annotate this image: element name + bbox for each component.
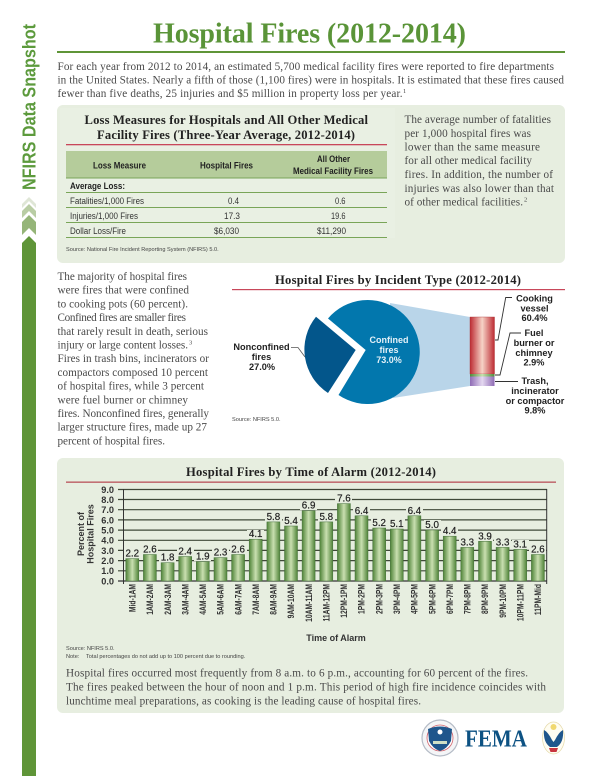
slice label: confined: Confined (370, 335, 408, 345)
value labels: 1.8 (161, 553, 175, 564)
x axis labels: 4PM-5PM (410, 584, 420, 614)
side text: injuries was also lower than that (404, 183, 555, 195)
left paragraph: confined fires: were fuel burner or chimney (58, 394, 188, 406)
value labels: 5.2 (372, 518, 386, 529)
loss table: All Other (317, 154, 350, 165)
loss table: $11,290 (317, 226, 346, 237)
logo: FEMA: FEMA (465, 726, 528, 752)
loss table: Hospital Fires (200, 160, 253, 172)
left paragraph: confined fires: percent of hospital fires. (58, 435, 165, 447)
value labels (125, 494, 545, 564)
slice label: confined (370, 335, 408, 365)
x axis labels: 7PM-8PM (463, 584, 473, 614)
x axis labels: 11AM-12PM (322, 584, 332, 621)
x axis labels: 6AM-7AM (233, 584, 244, 615)
x axis labels (128, 584, 543, 622)
y axis labels: 5.0 (101, 526, 114, 536)
label: trash (506, 376, 565, 416)
label: fuel burner: burner or (514, 338, 555, 348)
loss table: Loss Measure (93, 160, 146, 172)
sidebar chevrons and bar (22, 197, 36, 776)
y axis title: Percent of (76, 511, 86, 556)
side text: The average number of fatalities (404, 114, 551, 126)
pie chart: incident type (232, 273, 565, 423)
label: cooking vessel: 60.4% (521, 313, 548, 323)
y axis labels: 2.0 (101, 556, 114, 566)
bottom paragraph: The fires peaked between the hour of noon and 1 p.m. This period of high fire incidence coincides with (66, 682, 546, 694)
x axis labels: 3PM-4PM (392, 584, 402, 614)
loss table: 17.3 (224, 211, 240, 222)
left paragraph: confined fires: were fires that were confined (58, 285, 189, 297)
side text (404, 114, 555, 208)
left paragraph: confined fires: injury or large content losses. (58, 340, 188, 352)
side text: for all other medical facility (404, 155, 532, 167)
x axis title: Time of Alarm (306, 633, 366, 643)
intro paragraph (58, 61, 564, 100)
label: cooking vessel: vessel (520, 304, 549, 314)
chart source and note: Total percentages do not add up to 100 percent due to rounding. (86, 654, 246, 660)
x axis labels: 8PM-9PM (480, 584, 490, 614)
x axis labels: 11PM-Mid (533, 584, 543, 615)
chart source and note (66, 646, 246, 660)
table heading: Facility Fires (Three-Year Average, 2012-2014) (97, 128, 355, 142)
label: fuel burner: chimney (515, 348, 554, 358)
x axis labels: 5AM-6AM (216, 584, 226, 615)
y axis labels: 0.0 (101, 576, 114, 586)
loss table (66, 151, 387, 238)
value labels: 3.9 (478, 531, 492, 542)
chart heading: Hospital Fires by Incident Type (2012-2014) (275, 273, 521, 287)
y axis labels: 9.0 (101, 485, 114, 495)
value labels: 5.1 (390, 519, 404, 530)
x axis labels: 9PM-10PM (498, 584, 508, 618)
left paragraph: confined fires: fires. Nonconfined fires, generally (58, 408, 209, 420)
x axis labels: 12PM-1PM (339, 584, 349, 618)
left paragraph: confined fires: Confined fires are smaller fires (58, 312, 186, 324)
x axis labels: Mid-1AM (128, 584, 138, 612)
x axis labels: 1PM-2PM (357, 584, 367, 614)
pie source: Source: NFIRS 5.0. (232, 417, 281, 423)
sidebar label: NFIRS Data Snapshot (18, 24, 40, 190)
y axis title: Hospital Fires (86, 504, 96, 564)
value labels: 2.4 (178, 546, 193, 558)
side text: of other medical facilities. (404, 196, 523, 208)
value labels: 2.6 (231, 544, 245, 556)
chart heading: Hospital Fires by Time of Alarm (2012-2014) (186, 465, 436, 479)
x axis labels: 1AM-2AM (145, 584, 155, 615)
value labels: 7.6 (337, 494, 351, 505)
loss table: Injuries/1,000 Fires (70, 211, 138, 222)
left paragraph: confined fires: Fires in trash bins, incinerators or (58, 353, 209, 365)
x axis labels: 2AM-3AM (163, 584, 173, 615)
y axis labels: 6.0 (101, 515, 114, 525)
x axis labels: 7AM-8AM (251, 584, 261, 615)
label: trash: Trash, (521, 376, 549, 386)
connector wedge (390, 303, 470, 398)
x axis labels: 10PM-11PM (515, 584, 526, 621)
value labels: 6.9 (302, 501, 315, 512)
value labels: 6.4 (408, 506, 422, 517)
value labels: 5.4 (284, 516, 298, 527)
side text: lower than the same measure (404, 142, 540, 154)
loss table: Dollar Loss/Fire (70, 226, 126, 237)
panel: time of alarm (57, 458, 564, 713)
value labels: 3.1 (513, 539, 527, 550)
label: fuel burner: 2.9% (524, 358, 544, 368)
x axis labels: 4AM-5AM (198, 584, 208, 615)
intro paragraph: 1 (403, 88, 406, 95)
y axis title (76, 504, 96, 564)
value labels: 4.1 (249, 529, 263, 540)
side text: 2 (524, 196, 527, 204)
label: fuel burner: Fuel (525, 328, 543, 338)
title: Hospital Fires (2012-2014) (153, 18, 466, 50)
label: cooking vessel: Cooking (516, 294, 553, 304)
left paragraph: confined fires: compactors composed 10 percent (58, 367, 209, 379)
y axis labels: 4.0 (101, 536, 114, 546)
value labels: 4.4 (443, 526, 457, 537)
stacked bar (470, 317, 494, 386)
pie slice: nonconfined (304, 317, 356, 393)
value labels: 2.2 (125, 548, 139, 560)
left paragraph: confined fires: that rarely result in death, serious (58, 326, 208, 338)
slice label: confined: 73.0% (376, 355, 402, 365)
slice label: nonconfined: fires (252, 352, 271, 362)
label: fuel burner (514, 328, 555, 368)
value labels: 1.9 (196, 552, 210, 563)
bottom paragraph: lunchtime meal preparations, as cooking is the leading cause of hospital fires. (66, 696, 421, 708)
x axis labels: 6PM-7PM (445, 584, 455, 614)
value labels: 5.0 (425, 520, 439, 531)
left paragraph: confined fires: larger structure fires, made up 27 (58, 422, 207, 434)
y axis labels: 3.0 (101, 546, 114, 556)
bar chart (76, 485, 547, 643)
x axis labels: 9AM-10AM (286, 584, 296, 618)
loss table: 19.6 (331, 211, 346, 222)
stacked bar leader lines (495, 298, 521, 382)
grid (118, 489, 547, 584)
left paragraph: confined fires (58, 271, 209, 447)
slice label: nonconfined (233, 342, 290, 372)
icon: DHS seal (422, 720, 458, 756)
left paragraph: confined fires: The majority of hospital fires (58, 271, 187, 283)
pie slice: confined (328, 300, 420, 404)
bottom paragraph: Hospital fires occurred most frequently from 8 a.m. to 6 p.m., accounting for 60 percent of the fires. (66, 668, 528, 680)
label: trash: incinerator (511, 386, 559, 396)
bars (126, 504, 544, 581)
loss table: 0.6 (335, 196, 346, 207)
slice label: nonconfined: Nonconfined (233, 342, 290, 352)
value labels: 3.3 (496, 537, 510, 548)
value labels: 2.6 (143, 544, 157, 556)
x axis labels: 2PM-3PM (374, 584, 385, 614)
y axis labels: 8.0 (101, 495, 114, 505)
slice label: nonconfined: 27.0% (249, 362, 275, 372)
left paragraph: confined fires: of hospital fires, while 3 percent (58, 381, 205, 393)
loss table: Fatalities/1,000 Fires (70, 196, 144, 207)
value labels: 2.6 (531, 544, 545, 556)
table source: Source: National Fire Incident Reporting System (NFIRS) 5.0. (66, 247, 219, 253)
table heading: Loss Measures for Hospitals and All Other Medical (84, 113, 368, 127)
loss table: Medical Facility Fires (293, 166, 373, 177)
y axis labels: 1.0 (101, 566, 114, 576)
loss table: 0.4 (228, 196, 240, 207)
side text: per 1,000 hospital fires was (404, 128, 531, 140)
panel: loss measures (57, 105, 565, 263)
value labels: 5.8 (267, 512, 281, 523)
icon: USFA emblem (542, 722, 564, 754)
left paragraph: confined fires: 3 (189, 340, 192, 346)
bottom paragraph (66, 668, 546, 708)
label: trash: or compactor (506, 396, 565, 406)
loss table: $6,030 (214, 226, 239, 237)
table heading (84, 113, 368, 142)
intro paragraph: For each year from 2012 to 2014, an estimated 5,700 medical facility fires were reported to fire departments (58, 61, 554, 73)
x axis labels: 10AM-11AM (304, 584, 314, 622)
side text: fires. In addition, the number of (404, 169, 553, 181)
y axis labels: 7.0 (101, 505, 114, 515)
chart source and note: Note: (66, 654, 80, 660)
slice label: confined: fires (379, 345, 399, 355)
value label backgrounds (124, 494, 546, 562)
label: cooking vessel (516, 294, 553, 323)
x axis labels: 8AM-9AM (269, 584, 279, 615)
left paragraph: confined fires: to cooking pots (60 percent). (58, 298, 188, 310)
chart source and note: Source: NFIRS 5.0. (66, 646, 115, 652)
intro paragraph: fewer than five deaths, 25 injuries and $5 million in property loss per year. (58, 88, 403, 100)
value labels: 6.4 (355, 506, 369, 517)
x axis labels: 3AM-4AM (180, 584, 191, 615)
value labels: 2.3 (214, 548, 228, 559)
loss table: Average Loss: (70, 181, 125, 192)
sidebar: NFIRS Data Snapshot (18, 24, 40, 776)
value labels: 5.8 (319, 512, 334, 523)
y axis labels (101, 485, 114, 586)
value labels: 3.3 (460, 537, 475, 548)
label: trash: 9.8% (525, 406, 545, 416)
x axis labels: 5PM-6PM (427, 584, 438, 614)
intro paragraph: in the United States. Nearly a fifth of those (1,100 fires) were in hospitals. It is estimated that these fires caused (58, 74, 564, 86)
